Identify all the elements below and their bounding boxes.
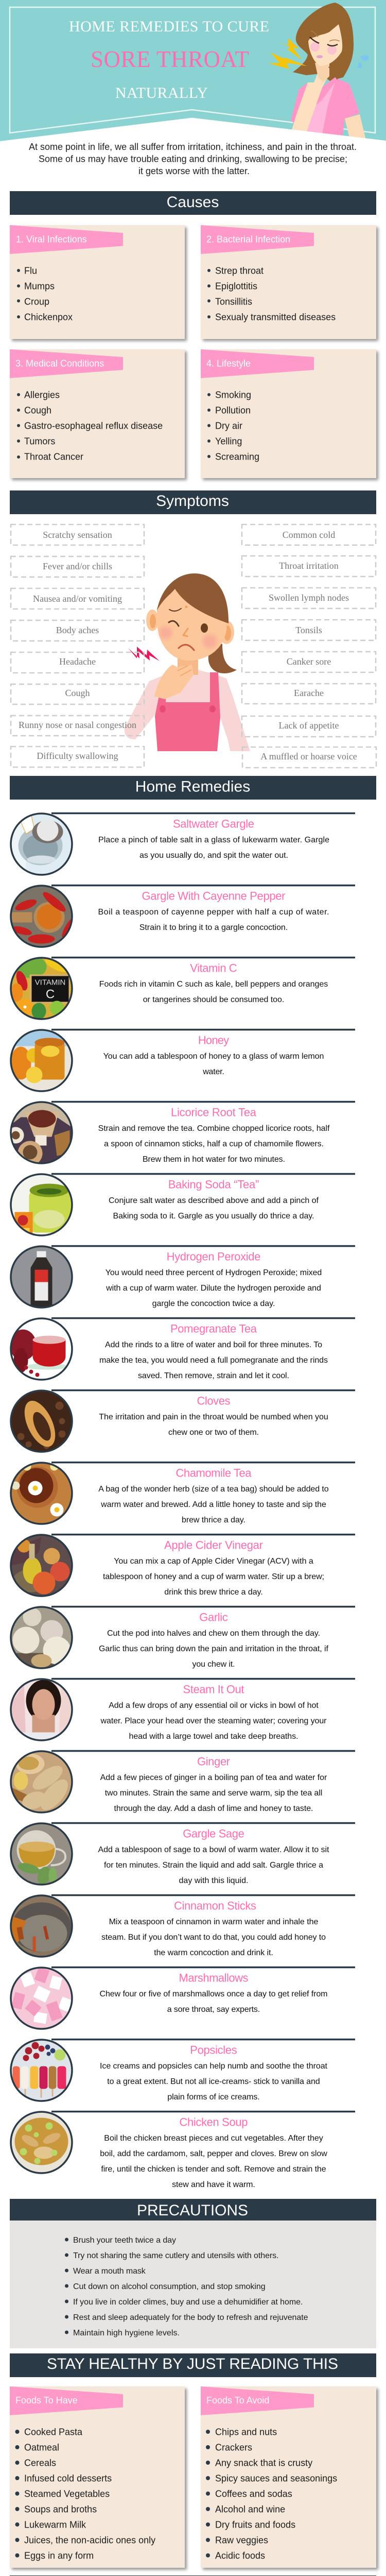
description: tablespoon of honey and a cup of warm water. Stir up a brew; xyxy=(103,1572,324,1581)
description: drink this brew thrice a day. xyxy=(164,1588,263,1597)
remedy: Pomegranate Tea xyxy=(9,1317,355,1380)
description: stew and have it warm. xyxy=(172,2180,255,2189)
symptoms: right column xyxy=(242,524,376,768)
list: foods to avoid: Spicy sauces and seasonings xyxy=(215,2473,337,2483)
list: medical: Tumors xyxy=(24,436,55,447)
list: precautions: Try not sharing the same cutlery and utensils with others. xyxy=(73,2251,279,2260)
list: foods to avoid: Alcohol and wine xyxy=(215,2504,285,2514)
description: to a great extent. But not all ice-creams- stick to vanilla and xyxy=(107,2077,320,2086)
symptoms: left column: Difficulty swallowing xyxy=(37,751,118,761)
photo: marshmallows xyxy=(10,1967,73,2029)
list: foods to avoid: Chips and nuts xyxy=(215,2427,277,2437)
panel: bacterial infection: 2. Bacterial Infection xyxy=(206,234,290,245)
description: warm water and brewed. Add a little honey to taste and sip the xyxy=(100,1500,326,1509)
list: foods to have: Infused cold desserts xyxy=(24,2473,112,2483)
panel: lifestyle xyxy=(201,349,376,478)
photo: pomegranate tea xyxy=(9,1318,72,1380)
heading: Causes: Causes xyxy=(167,194,219,211)
description: Add a few pieces of ginger in a boiling pan of tea and water for xyxy=(100,1773,327,1782)
remedy: Cloves xyxy=(10,1389,355,1452)
heading: Popsicles xyxy=(190,2043,237,2057)
list: foods to have: Soups and broths xyxy=(24,2504,97,2514)
list: bacterial: Epiglottitis xyxy=(215,281,257,292)
list: foods to have: Eggs in any form xyxy=(24,2550,94,2561)
description: Chew four or five of marshmallows once a day to get relief from xyxy=(100,1990,327,1998)
remedy: Cinnamon Sticks xyxy=(10,1894,355,1957)
photo: vitamin C foods: VITAMIN xyxy=(35,978,65,987)
symptoms: left column: Headache xyxy=(59,656,96,667)
description: or tangerines should be consumed too. xyxy=(143,995,284,1004)
description: You can add a tablespoon of honey to a glass of warm lemon xyxy=(103,1052,324,1061)
heading: Home Remedies xyxy=(10,776,376,800)
remedy: Apple Cider Vinegar xyxy=(10,1534,355,1597)
description xyxy=(106,1268,322,1308)
list: viral: Croup xyxy=(24,297,49,307)
title: SORE THROAT xyxy=(91,46,249,72)
symptoms: right column: Common cold xyxy=(283,530,335,540)
description: chew one or two of them. xyxy=(168,1428,259,1437)
title: HOME REMEDIES TO CURE xyxy=(69,18,269,35)
title xyxy=(69,18,269,101)
description xyxy=(103,1052,324,1076)
description: water. xyxy=(202,1067,224,1076)
heading: Consult xyxy=(10,2575,376,2576)
remedy: Hydrogen Peroxide xyxy=(10,1245,355,1308)
list: bacterial xyxy=(207,266,336,323)
description: plain forms of ice creams. xyxy=(167,2093,260,2102)
description: You can mix a cap of Apple Cider Vinegar (ACV) with a xyxy=(114,1557,313,1566)
photo: cayenne pepper xyxy=(10,885,77,947)
description: for ten minutes. Strain the liquid and add salt. Gargle thrice a xyxy=(104,1861,323,1870)
description xyxy=(98,836,329,860)
heading: Precautions: PRECAUTIONS xyxy=(137,2202,248,2219)
heading: Pomegranate Tea xyxy=(170,1322,257,1335)
description xyxy=(100,1773,327,1813)
list: precautions: If you live in colder climes, buy and use a dehumidifier at home. xyxy=(73,2298,303,2307)
icon: sweat drops xyxy=(358,55,369,68)
description xyxy=(99,980,328,1004)
heading: Ginger xyxy=(197,1755,230,1768)
remedy: Gargle Sage xyxy=(10,1822,355,1887)
symptoms: left column: Cough xyxy=(65,688,90,698)
remedy: Licorice Root Tea xyxy=(7,1101,355,1165)
intro text: it gets worse with the latter. xyxy=(138,166,250,176)
description xyxy=(99,1341,328,1380)
illustration: woman with sore throat xyxy=(291,3,366,140)
symptoms: left column xyxy=(11,524,144,767)
description xyxy=(100,2062,328,2102)
description xyxy=(98,1485,329,1524)
list: foods to avoid xyxy=(206,2427,337,2561)
intro text: At some point in life, we all suffer from irritation, itchiness, and pain in the throat. xyxy=(29,142,357,152)
list: viral: Chickenpox xyxy=(24,312,73,323)
list: lifestyle: Dry air xyxy=(215,421,242,431)
heading: Symptoms xyxy=(10,490,376,514)
description xyxy=(100,2134,327,2189)
symptoms: right column: Tonsils xyxy=(295,625,322,635)
description: Cut the pod into halves and chew on them through the day. xyxy=(107,1629,320,1638)
list: precautions: Wear a mouth mask xyxy=(73,2267,146,2276)
heading: Garlic xyxy=(199,1611,228,1624)
heading: Gargle With Cayenne Pepper xyxy=(142,889,285,903)
list: precautions xyxy=(65,2236,308,2337)
symptoms: left column: Fever and/or chills xyxy=(43,561,112,571)
description: through the day. Add a dash of lime and honey to taste. xyxy=(114,1804,313,1813)
remedy: Marshmallows xyxy=(10,1967,355,2029)
photo: woman steaming face xyxy=(10,1679,72,1742)
list: precautions: Maintain high hygiene levels. xyxy=(73,2329,180,2337)
list: lifestyle xyxy=(207,390,259,462)
remedy: Vitamin C xyxy=(10,955,355,1019)
description: gargle the concoction twice a day. xyxy=(152,1299,275,1308)
list: medical: Gastro-esophageal reflux disease xyxy=(24,421,163,431)
remedy: Baking Soda Tea xyxy=(10,1173,355,1235)
remedy: Garlic xyxy=(10,1606,355,1669)
description: as you usually do, and spit the water out. xyxy=(139,851,288,860)
list: foods to avoid: Raw veggies xyxy=(215,2535,268,2545)
remedy: Gargle With Cayenne Pepper xyxy=(10,885,355,947)
list: precautions: Brush your teeth twice a day xyxy=(73,2236,176,2245)
description: Mix a teaspoon of cinnamon in warm water and inhale the xyxy=(109,1918,318,1926)
symptoms: right column: Swollen lymph nodes xyxy=(269,592,349,603)
photo: popsicles xyxy=(10,2039,72,2101)
photo: salt and water glass xyxy=(10,813,72,875)
list: precautions: Cut down on alcohol consumption, and stop smoking xyxy=(73,2282,266,2291)
heading: Stay Healthy xyxy=(10,2353,376,2377)
list: foods to avoid: Dry fruits and foods xyxy=(215,2519,295,2530)
list: viral: Mumps xyxy=(24,281,55,292)
symptoms: right column: Lack of appetite xyxy=(279,720,339,731)
heading: Cinnamon Sticks xyxy=(174,1899,256,1912)
description: with a cup of warm water. Dilute the hydrogen peroxide and xyxy=(106,1284,321,1293)
photo: honey and lemon tea xyxy=(10,1029,72,1091)
photo: chamomile tea xyxy=(10,1462,72,1524)
heading: Steam It Out xyxy=(183,1683,244,1696)
list: foods to have: Cereals xyxy=(24,2458,56,2468)
photo: chicken soup xyxy=(10,2111,72,2173)
panel: when to consult a doctor xyxy=(10,2575,376,2576)
panel: bacterial infection xyxy=(201,225,376,339)
photo: vitamin C foods: C xyxy=(46,987,55,1002)
heading: Apple Cider Vinegar xyxy=(164,1538,263,1552)
list: medical: Allergies xyxy=(24,390,60,400)
description: Strain it to bring it to a gargle concoction. xyxy=(139,923,288,932)
list: bacterial: Sexualy transmitted diseases xyxy=(215,312,336,323)
panel: viral infections xyxy=(10,225,185,339)
heading: Hydrogen Peroxide xyxy=(167,1250,260,1263)
description: Boil a teaspoon of cayenne pepper with half a cup of water. xyxy=(98,908,329,917)
list: precautions: Rest and sleep adequately for the body to refresh and rejuvenate xyxy=(73,2313,308,2322)
list: foods to avoid: Any snack that is crusty xyxy=(215,2458,312,2468)
photo: cloves on wooden scoop xyxy=(10,1390,72,1452)
description: Baking soda to it. Gargle as you usually do thrice a day. xyxy=(113,1212,314,1221)
list: medical: Throat Cancer xyxy=(24,452,83,462)
description: You would need three percent of Hydrogen Peroxide; mixed xyxy=(106,1268,322,1277)
heading: Marshmallows xyxy=(179,1971,248,1985)
description xyxy=(98,1124,330,1164)
heading: Gargle Sage xyxy=(183,1827,244,1840)
description: The irritation and pain in the throat would be numbed when you xyxy=(99,1413,328,1421)
list: foods to have: Oatmeal xyxy=(24,2442,59,2452)
header banner xyxy=(0,0,386,145)
symptoms: right column: Earache xyxy=(294,688,324,698)
panel: foods to have xyxy=(10,2386,185,2568)
list: medical: Cough xyxy=(24,405,51,416)
panel: medical conditions: 3. Medical Conditions xyxy=(15,359,104,369)
heading: Baking Soda “Tea” xyxy=(168,1178,259,1191)
photo: garlic bulbs xyxy=(10,1606,72,1668)
symptoms: left column: Runny nose or nasal congestion xyxy=(19,720,136,730)
description: boil, add the cardamom, salt, pepper and cloves. Brew on slow xyxy=(100,2149,327,2158)
panel: viral infections: 1. Viral Infections xyxy=(16,234,87,245)
heading: Saltwater Gargle xyxy=(173,817,254,831)
panel: foods to avoid: Foods To Avoid xyxy=(206,2395,269,2405)
list: foods to avoid: Crackers xyxy=(215,2442,252,2452)
list: viral xyxy=(17,266,73,323)
description: Boil the chicken breast pieces and cut vegetables. After they xyxy=(104,2134,323,2143)
description: Place a pinch of table salt in a glass of lukewarm water. Gargle xyxy=(98,836,329,844)
description xyxy=(98,1845,329,1885)
panel: foods to have: Foods To Have xyxy=(15,2395,78,2405)
description: steam. But if you don’t want to do that, you could add honey to xyxy=(101,1933,326,1942)
title: NATURALLY xyxy=(115,84,208,101)
icon: yellow pain bolts xyxy=(269,38,307,69)
intro text: Some of us may have trouble eating and drinking, swallowing to be precise; xyxy=(39,154,347,164)
heading: Symptoms: Symptoms xyxy=(156,493,229,510)
description xyxy=(99,1413,328,1437)
panel: precautions xyxy=(10,2199,376,2348)
description: saved. Then remove, strain and let it cool. xyxy=(138,1371,289,1380)
remedy: Honey xyxy=(10,1029,355,1091)
heading: Stay Healthy: STAY HEALTHY BY JUST READING THIS xyxy=(47,2355,338,2372)
photo: baking soda and glass xyxy=(10,1174,72,1235)
list: lifestyle: Pollution xyxy=(215,405,251,416)
symptoms: right column: Throat irritation xyxy=(279,561,339,571)
remedy: Chicken Soup xyxy=(10,2111,355,2189)
description: head with a large towel and take deep breaths. xyxy=(129,1732,299,1741)
description: A bag of the wonder herb (size of a tea bag) should be added to xyxy=(98,1485,329,1494)
remedy: Steam It Out xyxy=(10,1678,355,1742)
description xyxy=(98,908,329,932)
heading: Cloves xyxy=(197,1394,231,1408)
description: Conjure salt water as described above and add a pinch of xyxy=(109,1196,319,1205)
photo: ginger root xyxy=(10,1751,73,1815)
symptoms: left column: Body aches xyxy=(56,625,99,635)
heading: Honey xyxy=(198,1033,229,1047)
remedy: Ginger xyxy=(10,1750,355,1815)
symptoms: left column: Scratchy sensation xyxy=(43,530,112,540)
description: Strain and remove the tea. Combine chopped licorice roots, half xyxy=(98,1124,330,1133)
list: lifestyle: Yelling xyxy=(215,436,242,447)
description: brew thrice a day. xyxy=(182,1516,245,1524)
description: make the tea, you would need a full pomegranate and the rinds xyxy=(99,1356,328,1365)
list: bacterial: Strep throat xyxy=(215,266,264,276)
description xyxy=(99,1629,329,1669)
photo: peroxide bottle xyxy=(10,1246,72,1308)
description: a spoon of cinnamon sticks, half a cup of chamomile flowers. xyxy=(104,1140,324,1148)
remedy: Popsicles xyxy=(10,2039,355,2102)
symptoms: right column: A muffled or hoarse voice xyxy=(260,751,357,761)
description: water. Place your head over the steaming water; covering your xyxy=(100,1717,327,1725)
panel: medical conditions xyxy=(10,349,185,478)
description: two minutes. Strain the same and serve warm, sip the tea all xyxy=(105,1789,322,1798)
remedy: Saltwater Gargle xyxy=(10,812,355,875)
list: foods to have xyxy=(15,2427,155,2561)
description xyxy=(100,1990,327,2014)
description xyxy=(101,1918,326,1957)
heading: Chicken Soup xyxy=(179,2115,248,2129)
description xyxy=(103,1557,324,1597)
header frame xyxy=(10,7,375,133)
illustration: girl holding throat xyxy=(125,573,250,751)
description: Add a few drops of any essential oil or vicks in bowl of hot xyxy=(109,1701,319,1710)
heading: Causes xyxy=(10,191,376,215)
description: Ice creams and popsicles can help numb and soothe the throat xyxy=(100,2062,328,2071)
remedy: Chamomile Tea xyxy=(10,1462,355,1524)
description: Add the rinds to a litre of water and boil for three minutes. To xyxy=(105,1341,322,1349)
description: day with this liquid. xyxy=(179,1876,248,1885)
heading: Precautions xyxy=(10,2199,376,2221)
list: foods to have: Steamed Vegetables xyxy=(24,2488,110,2499)
intro text xyxy=(29,142,357,176)
panel: lifestyle: 4. Lifestyle xyxy=(206,359,251,369)
photo: vitamin C foods xyxy=(10,955,72,1019)
icon: red pain bolt xyxy=(128,647,160,661)
description: Brew them in hot water for two minutes. xyxy=(143,1155,285,1164)
description: fire, until the chicken is tender and soft. Remove and strain the xyxy=(101,2165,326,2174)
list: medical xyxy=(17,390,163,462)
list: foods to have: Cooked Pasta xyxy=(24,2427,83,2437)
description: Add a tablespoon of sage to a bowl of warm water. Allow it to sit xyxy=(98,1845,329,1854)
heading: Chamomile Tea xyxy=(176,1466,252,1480)
description xyxy=(100,1701,327,1741)
list: lifestyle: Smoking xyxy=(215,390,251,400)
heading: Vitamin C xyxy=(190,961,237,975)
description xyxy=(109,1196,319,1221)
description: a sore throat, say experts. xyxy=(167,2005,260,2014)
description: you chew it. xyxy=(192,1660,235,1669)
photo: sage tea xyxy=(10,1823,72,1887)
list: foods to avoid: Coffees and sodas xyxy=(215,2488,292,2499)
description: Garlic thus can bring down the pain and irritation in the throat, if xyxy=(99,1645,329,1653)
symptoms: right column: Canker sore xyxy=(287,656,331,667)
photo: apples and vinegar xyxy=(10,1534,72,1596)
list: viral: Flu xyxy=(24,266,37,276)
list: foods to have: Lukewarm Milk xyxy=(24,2519,86,2530)
list: foods to have: Juices, the non-acidic ones only xyxy=(24,2535,155,2545)
symptoms: left column: Nausea and/or vomiting xyxy=(33,594,122,604)
list: lifestyle: Screaming xyxy=(215,452,259,462)
description: Foods rich in vitamin C such as kale, bell peppers and oranges xyxy=(99,980,328,989)
panel: foods to avoid xyxy=(201,2386,376,2568)
photo: licorice tea cup xyxy=(7,1101,72,1165)
photo: cinnamon in water xyxy=(10,1895,72,1957)
list: foods to avoid: Acidic foods xyxy=(215,2550,265,2561)
description: the warm concoction and drink it. xyxy=(154,1948,273,1957)
heading: Home Remedies: Home Remedies xyxy=(135,778,250,795)
list: bacterial: Tonsillitis xyxy=(215,297,252,307)
heading: Licorice Root Tea xyxy=(171,1106,257,1119)
